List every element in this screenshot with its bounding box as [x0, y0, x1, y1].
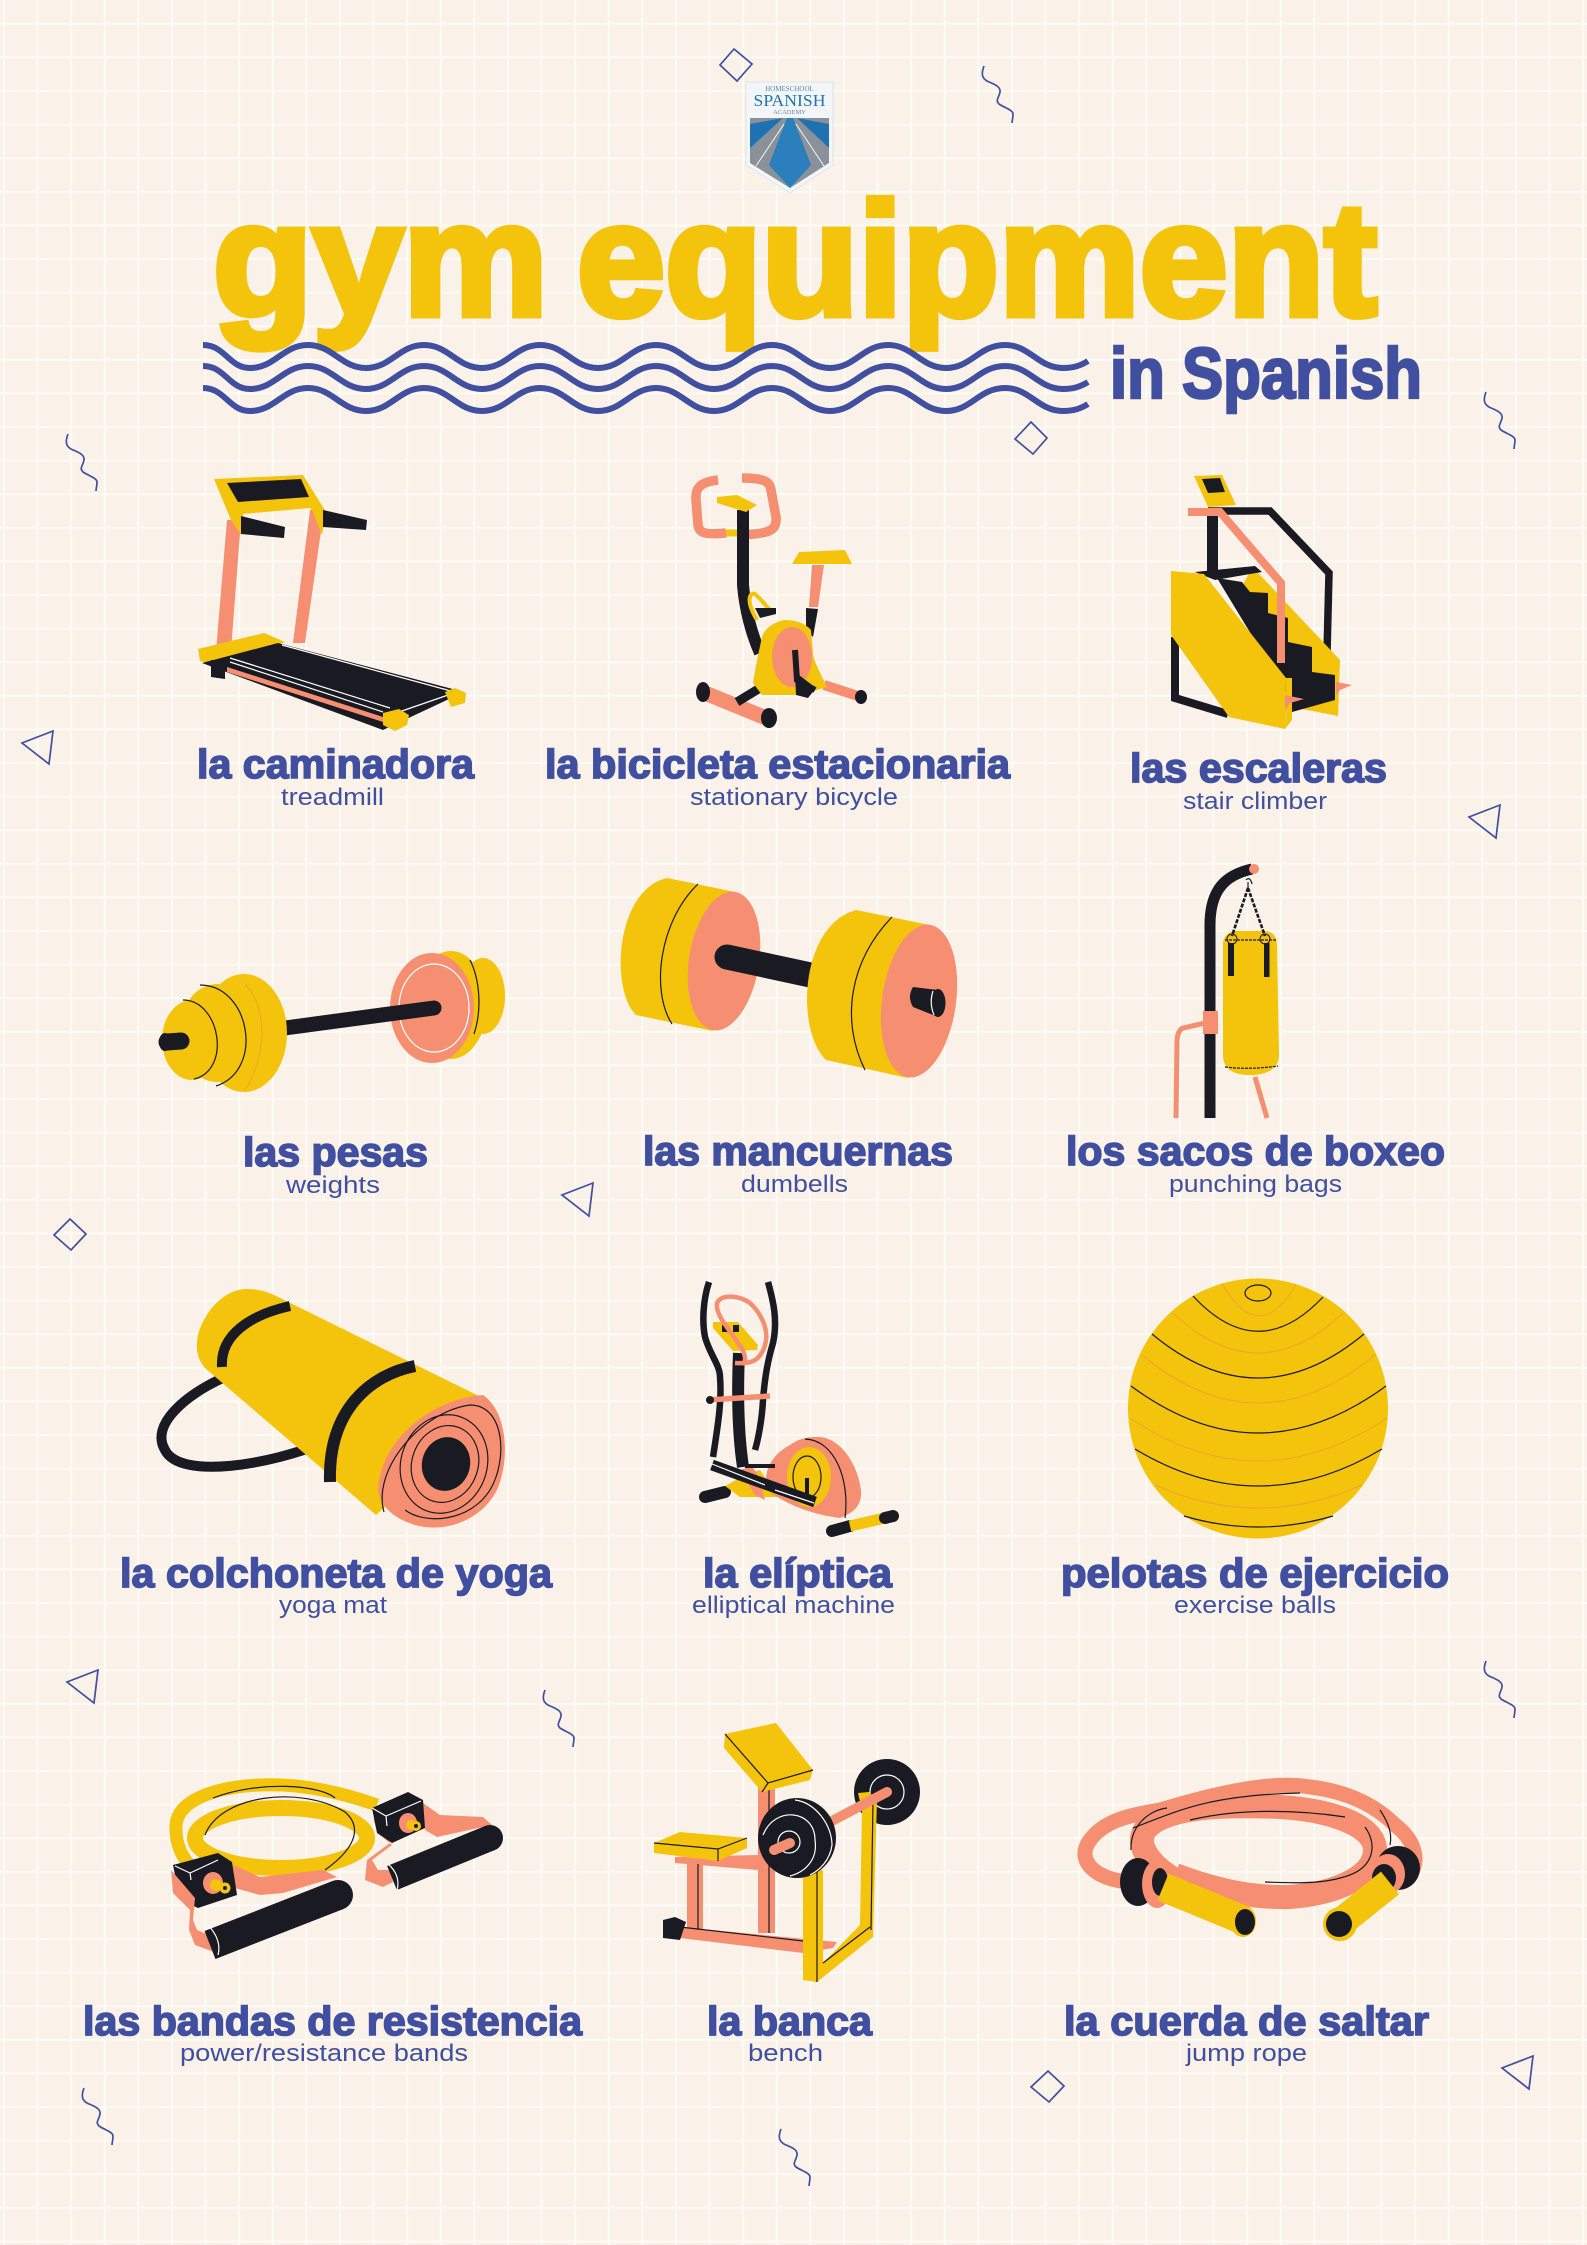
label: las escaleras / stair climber	[1130, 745, 1387, 815]
icon: resistance bands	[171, 1785, 503, 1955]
icon: weights	[159, 951, 505, 1092]
label: la banca / bench: la banca	[707, 1998, 873, 2044]
label: pelotas de ejercicio / exercise balls: pelotas de ejercicio	[1061, 1550, 1449, 1596]
label: la colchoneta de yoga / yoga mat: yoga mat	[279, 1592, 387, 1619]
label: las bandas de resistencia / power/resistance bands: las bandas de resistencia	[83, 1998, 583, 2044]
subtitle: in Spanish: in Spanish	[1110, 335, 1422, 414]
logo: Homeschool Spanish Academy shield: ACADEMY	[773, 109, 806, 116]
icon: yoga mat	[161, 1289, 505, 1528]
label: la cuerda de saltar / jump rope	[1064, 1998, 1429, 2067]
label: las bandas de resistencia / power/resistance bands: power/resistance bands	[180, 2040, 468, 2067]
label: la cuerda de saltar / jump rope: la cuerda de saltar	[1064, 1998, 1429, 2044]
label: la bicicleta estacionaria / stationary bicycle: la bicicleta estacionaria	[545, 741, 1011, 787]
label: la banca / bench: bench	[748, 2040, 823, 2067]
label: los sacos de boxeo / punching bags: punching bags	[1169, 1171, 1342, 1198]
label: las pesas / weights: las pesas	[243, 1129, 428, 1175]
decorative triangles	[22, 731, 1533, 2089]
icon: dumbbells	[621, 878, 966, 1082]
icon: stationary bicycle	[696, 478, 867, 728]
icon: punching bag	[1176, 864, 1279, 1118]
icon: exercise ball	[1128, 1278, 1388, 1538]
label: la colchoneta de yoga / yoga mat	[120, 1550, 553, 1619]
title: gym equipment	[213, 170, 1377, 350]
label: las escaleras / stair climber: las escaleras	[1130, 745, 1387, 791]
logo: Homeschool Spanish Academy shield: SPANISH	[754, 91, 826, 110]
title: gym equipment: gym	[213, 170, 548, 350]
label: las pesas / weights	[243, 1129, 428, 1199]
label: pelotas de ejercicio / exercise balls: exercise balls	[1174, 1592, 1336, 1619]
icon: jump rope	[1085, 1785, 1420, 1941]
label: las mancuernas / dumbells: dumbells	[741, 1171, 848, 1198]
icon: elliptical machine	[703, 1282, 893, 1531]
icon: bench	[654, 1723, 920, 1982]
title: gym equipment: equipment	[577, 170, 1377, 350]
logo: Homeschool Spanish Academy shield: HOMESCHOOL	[765, 85, 814, 93]
label: pelotas de ejercicio / exercise balls	[1061, 1550, 1449, 1619]
icon: stair climber	[1171, 475, 1352, 729]
wavy lines under title	[203, 345, 1088, 411]
label: la cuerda de saltar / jump rope: jump rope	[1185, 2040, 1307, 2067]
label: la bicicleta estacionaria / stationary bicycle: stationary bicycle	[690, 784, 898, 811]
label: los sacos de boxeo / punching bags: los sacos de boxeo	[1066, 1128, 1445, 1174]
label: las escaleras / stair climber: stair climber	[1183, 788, 1327, 815]
decorative diamonds	[54, 49, 1064, 2102]
label: la elíptica / elliptical machine	[692, 1550, 895, 1619]
label: la elíptica / elliptical machine: elliptical machine	[692, 1592, 895, 1619]
label: la caminadora / treadmill: treadmill	[281, 784, 384, 811]
label: las bandas de resistencia / power/resistance bands	[83, 1998, 583, 2067]
label: la elíptica / elliptical machine: la elíptica	[703, 1550, 893, 1596]
label: la caminadora / treadmill: la caminadora	[197, 741, 475, 787]
icon: treadmill	[198, 475, 466, 731]
label: las mancuernas / dumbells: las mancuernas	[643, 1128, 953, 1174]
label: la bicicleta estacionaria / stationary bicycle	[545, 741, 1011, 811]
label: la colchoneta de yoga / yoga mat: la colchoneta de yoga	[120, 1550, 553, 1596]
label: los sacos de boxeo / punching bags	[1066, 1128, 1445, 1198]
label: la banca / bench	[707, 1998, 873, 2067]
label: la caminadora / treadmill	[197, 741, 475, 811]
logo: Homeschool Spanish Academy shield	[746, 82, 833, 193]
label: las pesas / weights: weights	[285, 1172, 380, 1199]
label: las mancuernas / dumbells	[643, 1128, 953, 1198]
